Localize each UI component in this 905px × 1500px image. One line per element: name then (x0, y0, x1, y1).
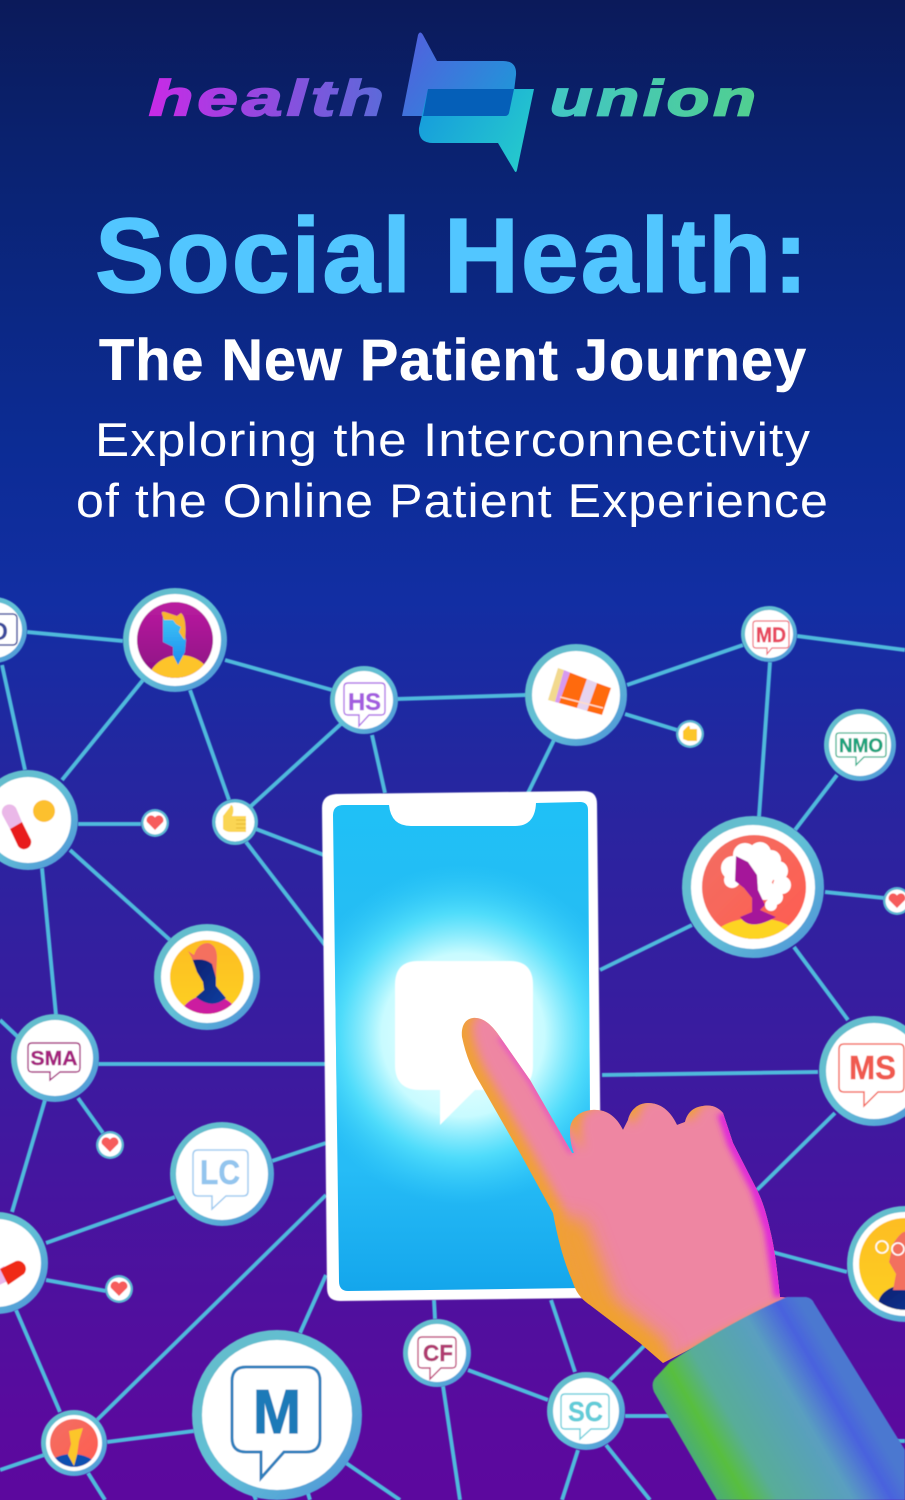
node: SC badge: SC (568, 1396, 603, 1427)
node: pill (0, 1212, 48, 1314)
node: pill and tablet (0, 770, 78, 870)
node: HS badge: HS (348, 689, 381, 716)
node: SMA badge: SMA (30, 1048, 78, 1070)
node: NMO badge (824, 709, 896, 781)
subtitle: The New Patient Journey: The New Patient Journey (99, 328, 807, 393)
phone (322, 791, 602, 1301)
node: heart (96, 1131, 124, 1159)
node: LC badge (170, 1122, 274, 1226)
node: partial MD badge at left edge (0, 597, 27, 663)
logo wordmark: union: union (550, 70, 760, 126)
screen glow (333, 802, 591, 1291)
node: NMO badge: NMO (839, 736, 883, 757)
glowing chat bubble (395, 961, 533, 1125)
node: person with white curly hair (682, 816, 824, 974)
logo icon: overlapping speech bubbles (402, 32, 534, 172)
node: thumbs up small (676, 720, 704, 748)
node: HS badge (330, 666, 398, 734)
node: heart (105, 1275, 133, 1303)
network connection lines (0, 632, 905, 1500)
node: person with navy face and coral hair (154, 924, 260, 1045)
node: person with glasses (847, 1206, 905, 1325)
logo wordmark: health: health (149, 70, 388, 126)
node: CF badge: CF (423, 1340, 453, 1366)
description line 1: Exploring the Interconnectivity (95, 413, 811, 466)
node: heart right edge (883, 887, 905, 915)
node: SC badge (547, 1372, 625, 1450)
description line 2: of the Online Patient Experience (76, 474, 829, 527)
node: person with yellow hair (41, 1410, 107, 1480)
node: MD badge (741, 606, 797, 662)
node: colorful card (525, 644, 627, 746)
node: heart (141, 809, 169, 837)
node: MS badge (819, 1016, 905, 1126)
node: MD badge: MD (756, 624, 786, 647)
node: Mighty M badge (192, 1330, 362, 1500)
pointing hand and sleeve (450, 1000, 905, 1500)
node: thumbs up (212, 799, 258, 845)
sleeve (653, 1297, 905, 1500)
phone screen (333, 802, 591, 1291)
node: SMA badge (11, 1014, 99, 1102)
node: MS badge: MS (849, 1049, 896, 1086)
phone body (322, 791, 602, 1301)
hand (462, 1018, 788, 1363)
logo: Health Union (149, 32, 760, 172)
node: LC badge: LC (200, 1154, 240, 1192)
node: CF badge (403, 1319, 471, 1387)
title: Social Health: Social Health: (95, 197, 810, 315)
node: person with blue face (122, 587, 228, 693)
node: Mighty M badge: M (253, 1378, 301, 1447)
